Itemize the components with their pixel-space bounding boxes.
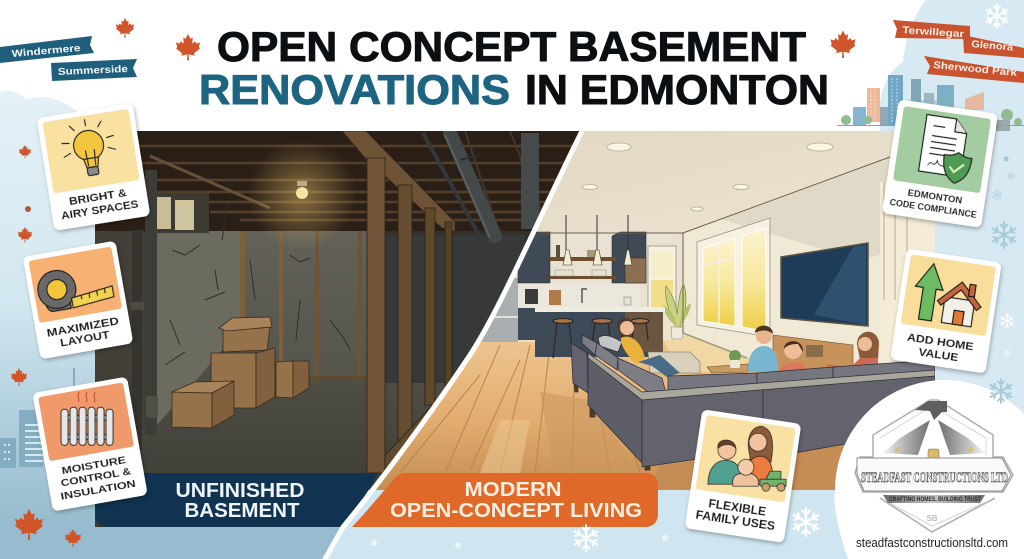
background: left blue cloud wash bbox=[0, 91, 95, 559]
ribbon: Glenora: Glenora bbox=[971, 39, 1014, 54]
logo initials: SB bbox=[926, 514, 938, 523]
background: bottom light blue band bbox=[310, 490, 1024, 559]
timber stud frame bbox=[342, 131, 455, 473]
media console bbox=[773, 335, 853, 372]
light beam on wall bbox=[684, 220, 880, 364]
coffee table with plant bbox=[707, 350, 748, 373]
website url: steadfastconstructionsltd.com bbox=[856, 536, 1008, 550]
card: Edmonton code compliance: CODE COMPLIANCE bbox=[889, 197, 977, 221]
ceiling joists bbox=[95, 131, 585, 235]
light bulb glow bbox=[252, 146, 352, 244]
card: add home value: VALUE bbox=[918, 346, 959, 364]
left dark wall bbox=[95, 231, 145, 430]
concrete side wall bbox=[157, 231, 240, 425]
window bbox=[157, 193, 209, 233]
icon: house bbox=[934, 279, 984, 328]
card: moisture control and insulation: INSULATION bbox=[60, 478, 137, 503]
overhead pipes bbox=[423, 133, 539, 238]
coffee machine and counter items bbox=[525, 289, 631, 305]
caption: unfinished basement bbox=[95, 473, 378, 527]
ribbon: Terwillegar bbox=[893, 20, 970, 40]
card: moisture control and insulation bbox=[32, 377, 148, 511]
card: maximized layout bbox=[23, 241, 133, 359]
upper cabinets bbox=[518, 232, 646, 283]
diagonal divider bbox=[325, 131, 582, 559]
panel: unfinished basement scene bbox=[95, 131, 585, 530]
icon: family bbox=[708, 426, 786, 491]
ribbon: Summerside bbox=[51, 59, 137, 81]
wall cracks bbox=[165, 205, 350, 365]
skyline bbox=[837, 75, 1024, 131]
man bbox=[748, 326, 778, 372]
maple leaves bbox=[11, 18, 856, 547]
kitchen island bbox=[535, 307, 665, 357]
kitchen backsplash bbox=[518, 283, 640, 307]
child bbox=[779, 341, 805, 372]
snowflakes and dots bbox=[371, 4, 1015, 551]
open shelves bbox=[550, 245, 616, 279]
card: maximized layout: LAYOUT bbox=[59, 329, 111, 350]
vertical pipes bbox=[131, 170, 158, 450]
pendant lights bbox=[563, 215, 632, 265]
potted plant bbox=[663, 285, 691, 339]
title: OPEN CONCEPT BASEMENT bbox=[217, 23, 806, 70]
label: MOISTURE bbox=[61, 454, 127, 477]
far dark wall bbox=[385, 235, 525, 383]
label: EDMONTON bbox=[907, 188, 963, 207]
right edge columns bbox=[880, 182, 935, 300]
lower cabinet bbox=[518, 308, 535, 340]
back door bbox=[648, 246, 676, 310]
background: right blue cloud wash bbox=[879, 0, 1024, 495]
left city silhouette bbox=[0, 368, 75, 468]
icon: light bulb bbox=[59, 116, 119, 179]
panel: modern open-concept living scene bbox=[330, 131, 940, 496]
logo emblem bbox=[855, 400, 1013, 532]
label: FLEXIBLE bbox=[708, 498, 767, 519]
card: bright and airy spaces: AIRY SPACES bbox=[60, 198, 139, 222]
woman right bbox=[827, 332, 879, 372]
caption: unfinished basement: UNFINISHED bbox=[176, 480, 304, 502]
back kitchen wall bbox=[510, 233, 683, 313]
baseboard bbox=[683, 333, 747, 358]
caption: modern open-concept living: OPEN-CONCEPT LIVING bbox=[390, 500, 642, 522]
right wall bbox=[683, 140, 935, 372]
card: flexible family uses: FAMILY USES bbox=[695, 510, 776, 533]
ribbon: Windermere: Windermere bbox=[11, 43, 82, 60]
label: MAXIMIZED bbox=[46, 315, 120, 340]
card: add home value bbox=[890, 249, 1002, 373]
title bbox=[199, 23, 829, 113]
woman on sofa bbox=[617, 318, 680, 377]
hardwood floor bbox=[376, 342, 845, 490]
icon: shield bbox=[940, 151, 973, 185]
ceiling bbox=[520, 131, 935, 233]
refrigerator bbox=[480, 278, 518, 342]
sofa back section bbox=[571, 335, 650, 470]
snowflake: top right of logo bbox=[991, 379, 1011, 403]
sectional sofa bbox=[588, 353, 935, 467]
ceiling edge line bbox=[540, 157, 890, 333]
icon: radiator bbox=[61, 392, 113, 445]
cardboard boxes bbox=[172, 317, 309, 428]
icon: tape measure bbox=[35, 261, 115, 313]
caption: unfinished basement: BASEMENT bbox=[184, 500, 300, 522]
ottoman bbox=[648, 352, 700, 373]
ceiling recessed lights bbox=[582, 143, 833, 211]
back wall with studs bbox=[240, 231, 367, 381]
light bulb bbox=[296, 181, 308, 199]
wall TV bbox=[781, 243, 868, 326]
bar stools bbox=[553, 318, 649, 358]
wall below door bbox=[663, 333, 683, 340]
title: RENOVATIONS bbox=[199, 66, 510, 113]
large window bbox=[697, 218, 770, 337]
lit floor by window bbox=[663, 334, 749, 372]
label: ADD HOME bbox=[906, 332, 974, 353]
ribbon: Sherwood Park bbox=[924, 56, 1024, 83]
caption: modern open-concept living: MODERN bbox=[464, 479, 562, 501]
ribbon: Windermere bbox=[0, 36, 94, 63]
card: Edmonton code compliance bbox=[882, 99, 998, 228]
floor bbox=[95, 352, 446, 522]
ribbon: Summerside: Summerside bbox=[58, 64, 129, 78]
title: IN EDMONTON bbox=[525, 66, 829, 113]
label: BRIGHT & bbox=[68, 187, 127, 208]
ribbon: Terwillegar: Terwillegar bbox=[902, 25, 965, 40]
card: bright and airy spaces bbox=[37, 103, 150, 231]
ribbon: Sherwood Park: Sherwood Park bbox=[933, 60, 1018, 79]
caption: modern open-concept living bbox=[352, 473, 658, 527]
card: moisture control and insulation: CONTROL & bbox=[60, 465, 132, 490]
logo tagline: CRAFTING HOMES, BUILDING TRUST bbox=[889, 496, 981, 503]
icon: document bbox=[919, 115, 969, 177]
background: bottom left darker band bbox=[0, 520, 345, 559]
icon: green arrow bbox=[911, 261, 947, 322]
ribbon: Glenora bbox=[963, 35, 1024, 58]
card: flexible family uses bbox=[685, 409, 801, 543]
logo badge bbox=[835, 380, 1024, 559]
